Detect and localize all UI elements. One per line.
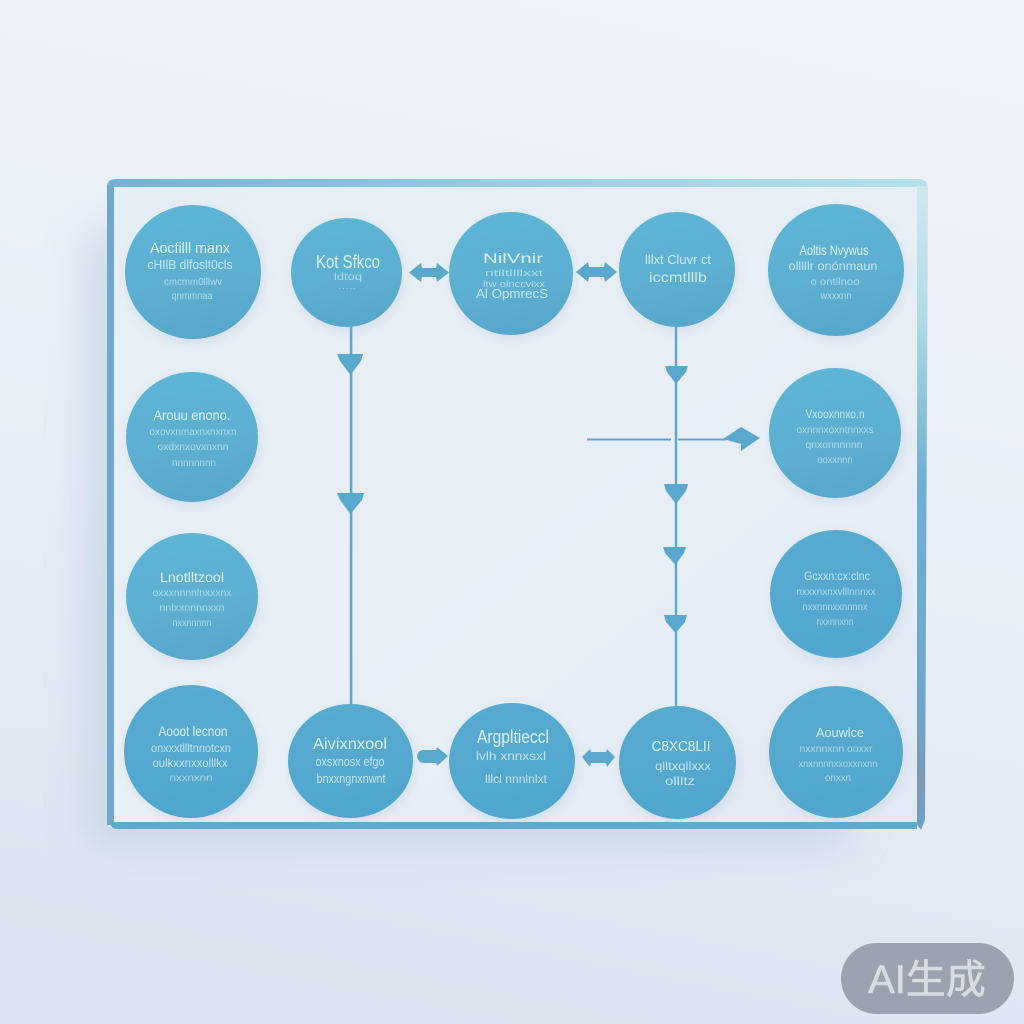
node: right circle 2: oxnnnxóxntnnxxs: [796, 425, 874, 436]
arrow: bottom right connector: [582, 749, 615, 767]
node: bottom right circle: xnxnnnnxxoxxnxnn: [798, 759, 878, 770]
frame left edge: [107, 185, 114, 825]
node: bottom row circle 2: Aivixnxool: [313, 736, 387, 753]
node: bottom right circle: [769, 686, 903, 818]
connector: right vertical flow: [663, 322, 688, 708]
node: right circle 3: nxxxnxnxvlllnnnxx: [796, 587, 876, 598]
node: bottom left circle: onxxxtllltnnotcxn: [151, 741, 231, 755]
node: top right circle: o ontllnoo: [810, 277, 860, 288]
node: top row circle 3: [449, 212, 573, 335]
node: left circle 2: [126, 372, 258, 502]
node: top row circle 3: ltw olnccvlxx: [483, 279, 546, 289]
badge: AI generated: [841, 943, 1014, 1014]
node: bottom row circle 4: ollltz: [665, 774, 695, 788]
node: left circle 3: nnlxxnnnnxxn: [160, 603, 224, 614]
node: right circle 3: nxxnnnxxnnnnx: [802, 602, 868, 613]
node: left circle 2: nnnnnnnn: [172, 458, 216, 469]
node: bottom left circle: oulkxxnxxolllkx: [152, 756, 228, 770]
node: left circle 3: oxxxnnnnlnxxxnx: [152, 588, 232, 599]
node: bottom left circle: Aooot lecnon: [158, 723, 228, 739]
node: bottom left circle: [124, 685, 258, 818]
node: bottom row circle 3: Argpltieccl: [477, 727, 549, 747]
node: top right circle: wxxxnn: [820, 291, 852, 302]
arrow: horizontal branch to right node: [587, 427, 760, 451]
node: top row circle 2: Kot Sfkco: [316, 252, 380, 272]
node: bottom row circle 2: oxsxnosx efgo: [316, 754, 384, 769]
panel surface: [110, 183, 922, 827]
node: left circle 3: nxxnnnnn: [172, 618, 212, 629]
node: bottom row circle 2: bnxxngnxnwnt: [316, 771, 386, 786]
node: right circle 2: qnxonnnnnn: [806, 440, 862, 451]
node: top row circle 2: .....: [338, 285, 356, 291]
node: top left circle: [125, 205, 261, 339]
node: top row circle 3: ntlltllllxxt: [485, 268, 544, 278]
node: bottom row circle 3: lllcl nnnlnlxt: [485, 772, 548, 786]
frame bottom edge: [110, 822, 917, 829]
node: right circle 3: Gcxxn:cx:clnc: [804, 569, 870, 583]
node: left circle 3: [126, 533, 258, 660]
node: left circle 2: oxdxnxovxnxnn: [158, 442, 228, 453]
connector: left vertical flow: [337, 325, 364, 707]
node: top right circle: olllllr onónmaun: [788, 259, 878, 273]
node: top row circle 4: [619, 212, 735, 327]
node: top row circle 3: NilVnir: [483, 250, 543, 266]
node: top row circle 2: [291, 218, 402, 327]
arrow: bottom left connector: [417, 747, 448, 766]
node: bottom row circle 3: lvlh xnnxsxl: [476, 749, 546, 763]
node: top row circle 3: Al OpmrecS: [476, 286, 548, 301]
node: right circle 2: ooxxnnn: [818, 455, 852, 466]
node: top row circle 4: lllxt Cluvr ct: [645, 252, 711, 267]
frame shadow: [88, 230, 848, 845]
node: bottom row circle 3: [449, 703, 575, 819]
node: top right circle: Aoltis Nvywus: [800, 242, 868, 258]
node: top right circle: [768, 204, 904, 336]
arrow: double arrow top left: [409, 263, 449, 282]
badge: AI generated: AI生成: [868, 958, 986, 1002]
node: left circle 3: Lnotlltzool: [160, 569, 224, 585]
node: left circle 2: oxovxnmaxnxnxnxn: [150, 427, 236, 438]
node: bottom row circle 4: C8XC8LII: [652, 738, 710, 755]
node: top left circle: cHIlB dlfoslt0cls: [148, 257, 233, 272]
node: top left circle: cmcmm0lllwv: [164, 277, 222, 288]
node: top row circle 2: ldtoq: [334, 272, 362, 283]
node: bottom left circle: nxxnxnn: [170, 773, 212, 784]
frame top edge: [107, 179, 928, 187]
node: bottom right circle: Aouwlce: [816, 725, 864, 740]
node: bottom row circle 4: qlltxqllxxx: [655, 759, 711, 773]
frame right edge: [917, 186, 928, 830]
node: right circle 2: [769, 368, 901, 498]
node: bottom row circle 2: [288, 704, 413, 818]
node: top row circle 4: iccmtlllb: [649, 269, 707, 285]
arrow: double arrow top right: [576, 262, 617, 282]
node: right circle 3: [770, 530, 902, 658]
node: bottom row circle 4: [619, 706, 736, 819]
node: top left circle: qnmmnaa: [172, 291, 213, 302]
node: top left circle: Aocfilll manx: [150, 240, 230, 257]
node: bottom right circle: onxxn: [825, 773, 851, 784]
panel: main frame: [107, 179, 928, 830]
node: right circle 2: Vxooxnnxo.n: [806, 407, 864, 421]
node: bottom right circle: nxxnnxnn ooxxr: [800, 744, 873, 755]
node: left circle 2: Arouu enono.: [154, 407, 230, 423]
node: right circle 3: nxxnnxnn: [816, 617, 854, 628]
